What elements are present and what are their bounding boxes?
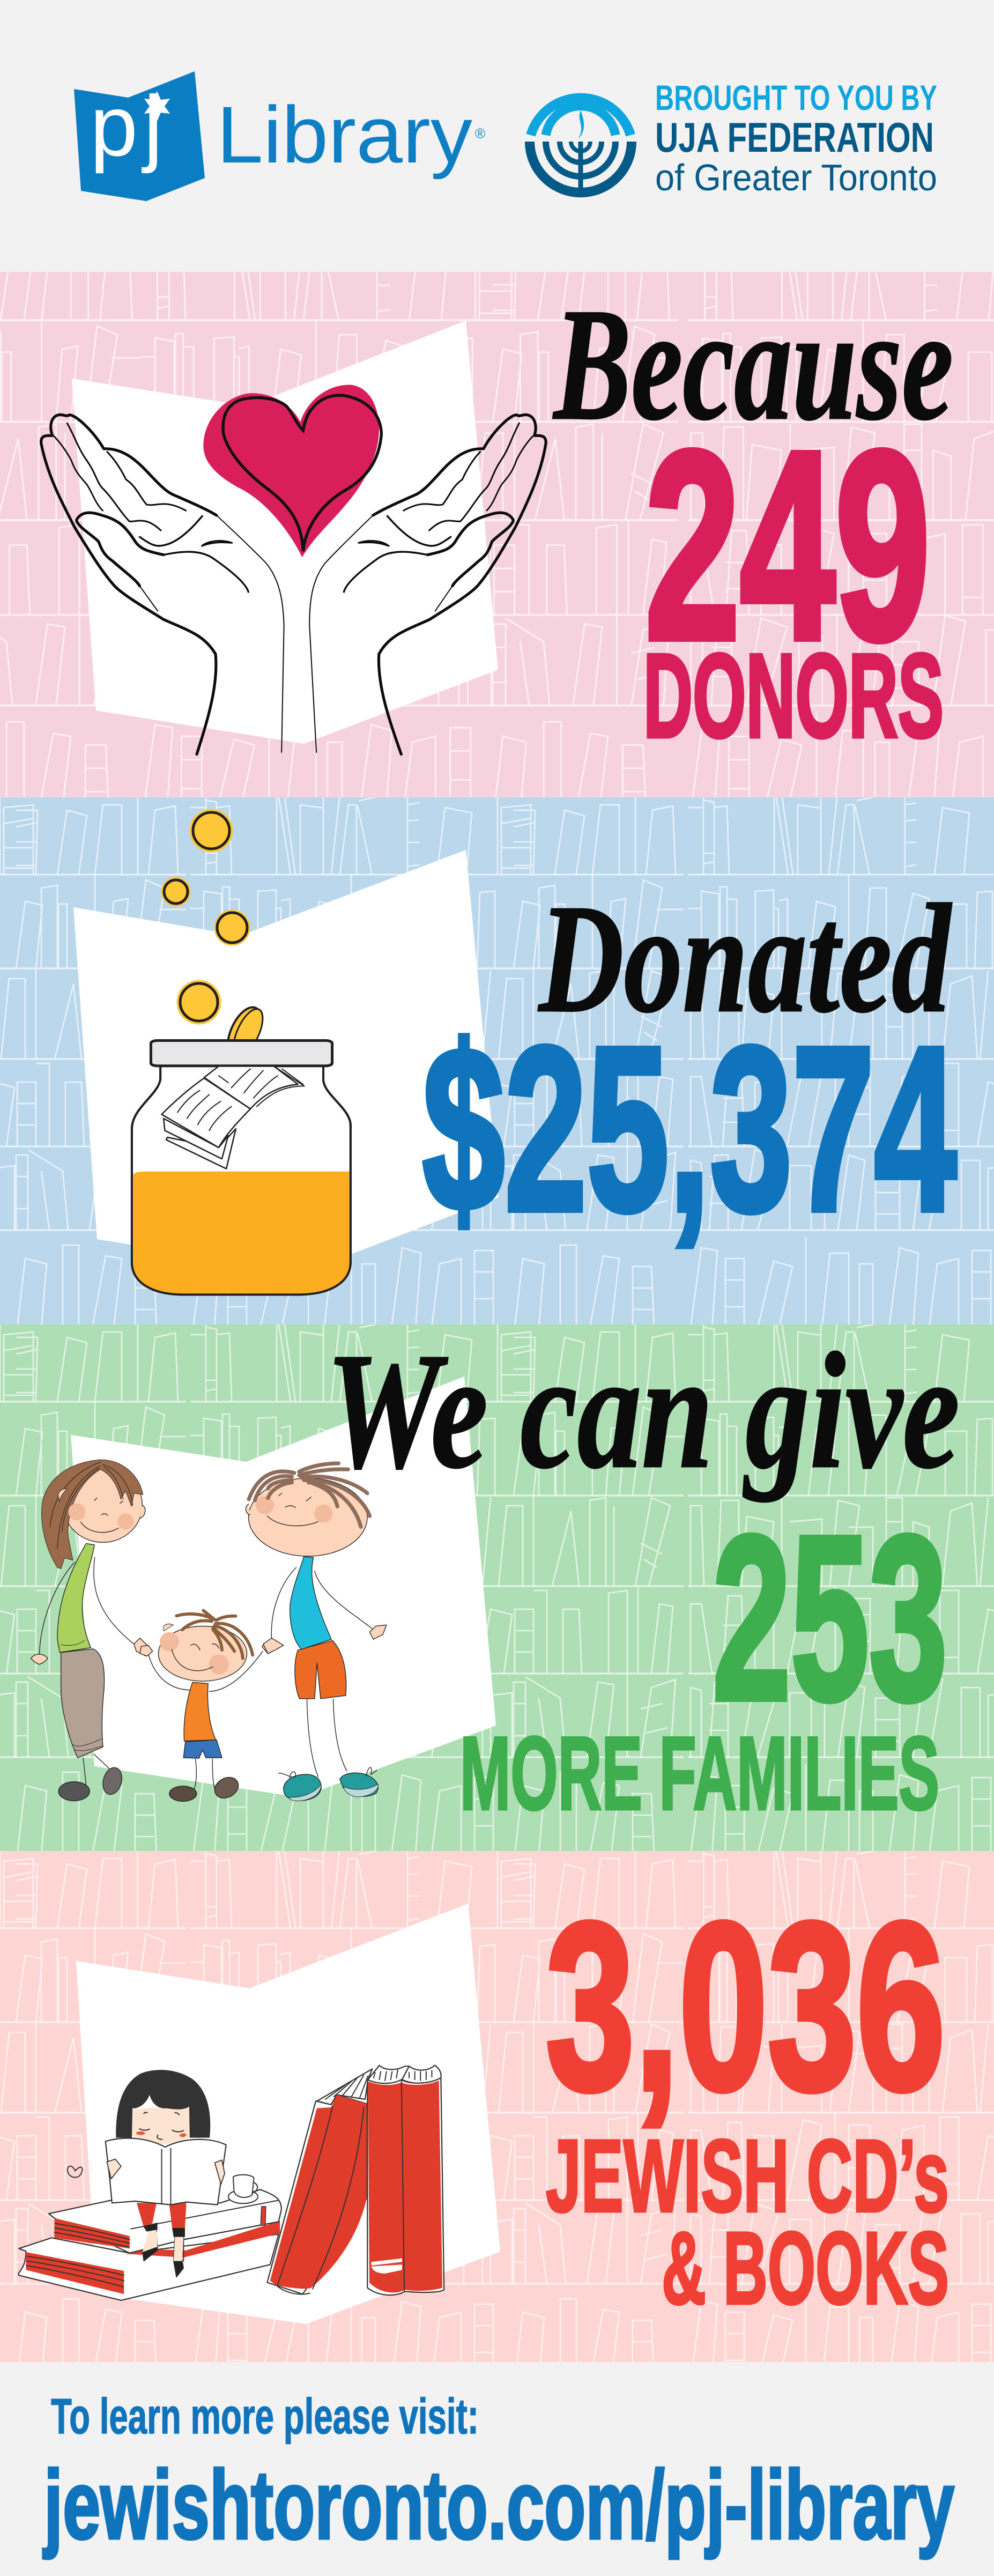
figure: boy [140, 1611, 284, 1802]
girl [106, 2070, 226, 2277]
small heart [68, 2166, 83, 2178]
panel: donated [0, 797, 994, 1328]
icon: blue book [74, 71, 205, 201]
book stack [18, 2189, 281, 2300]
logo: UJA Federation emblem [530, 98, 632, 193]
figure: mother [31, 1460, 153, 1801]
icon: right hand [302, 414, 557, 754]
icon: falling coins [162, 810, 269, 1062]
standing books [267, 2066, 444, 2295]
icon: heart [203, 385, 381, 557]
logo text: UJA Federation [655, 78, 937, 198]
panel: families [0, 1319, 994, 1855]
open book sheet [76, 1904, 500, 2324]
icon: jar [132, 1040, 351, 1294]
footer prompt: To learn more please visit: [51, 2388, 479, 2444]
illustration: girl reading on books [18, 2066, 444, 2300]
footer [0, 2362, 994, 2576]
icon: star of david [144, 91, 170, 121]
papers in jar [162, 1066, 305, 1169]
jar lid [151, 1040, 332, 1066]
header background [0, 0, 994, 272]
logo wordmark: Library [217, 90, 472, 180]
illustration: family [31, 1460, 387, 1802]
figure: father [246, 1463, 387, 1801]
registered mark: ® [475, 125, 485, 142]
of greater toronto: of Greater Toronto [655, 157, 937, 198]
open book sheet [71, 1376, 496, 1797]
logo letters pj: pj [90, 78, 163, 174]
cup [228, 2175, 258, 2203]
open book sheet [73, 850, 499, 1272]
logo: PJ Library [74, 71, 485, 201]
icon: left hand [41, 414, 284, 754]
panel: books [0, 1851, 994, 2382]
jar liquid [133, 1172, 350, 1293]
open book sheet [72, 321, 498, 744]
panel: donors [0, 236, 994, 812]
jar body [132, 1066, 351, 1294]
